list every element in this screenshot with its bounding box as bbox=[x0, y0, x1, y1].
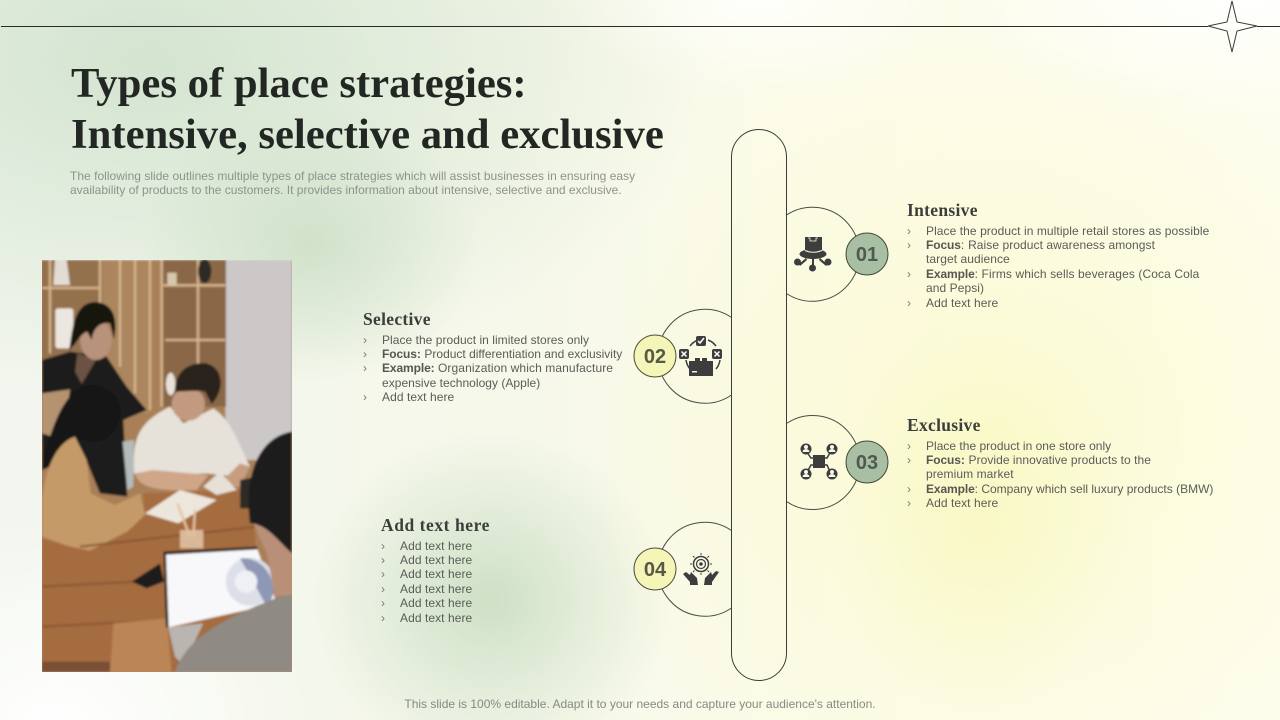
text block: exclusive: Exclusive bbox=[907, 415, 981, 435]
text block: add text here: › bbox=[381, 582, 385, 596]
text block: selective: Selective bbox=[363, 309, 431, 329]
icon: box with check and cross nodes bbox=[679, 336, 722, 376]
text block: add text here: Add text here bbox=[381, 515, 490, 535]
arc 01 bbox=[786, 207, 859, 301]
text block: selective: Add text here bbox=[382, 390, 454, 404]
badge 03: 03 bbox=[856, 452, 878, 474]
text block: selective: › bbox=[363, 361, 367, 375]
footer note: This slide is 100% editable. Adapt it to your needs and capture your audience's attention. bbox=[404, 697, 876, 711]
text block: intensive: target audience bbox=[926, 252, 1010, 266]
text block: intensive: Intensive bbox=[907, 200, 978, 220]
text block: intensive: › bbox=[907, 238, 911, 252]
text block: exclusive: › bbox=[907, 453, 911, 467]
text block: exclusive: Example: Company which sell luxury products (BMW) bbox=[926, 482, 1213, 496]
text block: add text here: Add text here bbox=[400, 582, 472, 596]
text block: exclusive: › bbox=[907, 496, 911, 510]
text block: exclusive: › bbox=[907, 439, 911, 453]
text block: selective: Example: Organization which manufacture bbox=[382, 361, 613, 375]
text block: exclusive: Focus: Provide innovative products to the bbox=[926, 453, 1151, 467]
text block: exclusive: › bbox=[907, 482, 911, 496]
text block: selective: expensive technology (Apple) bbox=[382, 376, 540, 390]
text block: add text here: Add text here bbox=[400, 596, 472, 610]
text block: intensive: and Pepsi) bbox=[926, 281, 984, 295]
top rule with star ornament bbox=[1, 0, 1280, 52]
badge 02: 02 bbox=[644, 346, 666, 368]
text block: exclusive bbox=[907, 415, 1213, 510]
central pill timeline bbox=[731, 129, 787, 681]
text block: intensive: › bbox=[907, 296, 911, 310]
title bbox=[71, 60, 664, 158]
text block: intensive: Example: Firms which sells beverages (Coca Cola bbox=[926, 267, 1199, 281]
text block: selective bbox=[363, 309, 622, 404]
badge 01: 01 bbox=[856, 244, 878, 266]
text block: intensive: Add text here bbox=[926, 296, 998, 310]
node 01: intensive bbox=[786, 206, 888, 302]
text block: add text here: › bbox=[381, 611, 385, 625]
badge 04: 04 bbox=[644, 559, 667, 581]
text block: add text here: › bbox=[381, 567, 385, 581]
arc 04 bbox=[658, 522, 732, 616]
text block: add text here: Add text here bbox=[400, 553, 472, 567]
description: The following slide outlines multiple types of place strategies which will assist businesses in ensuring easy bbox=[70, 169, 635, 183]
text block: intensive: Focus: Raise product awareness amongst bbox=[926, 238, 1155, 252]
icon: hands holding target bbox=[683, 553, 719, 585]
text block: add text here: › bbox=[381, 539, 385, 553]
title: Intensive, selective and exclusive bbox=[71, 111, 664, 158]
text block: selective: Place the product in limited stores only bbox=[382, 333, 589, 347]
arc 02 bbox=[658, 309, 732, 403]
text block: exclusive: Add text here bbox=[926, 496, 998, 510]
text block: selective: Focus: Product differentiation and exclusivity bbox=[382, 347, 622, 361]
text block: add text here: Add text here bbox=[400, 567, 472, 581]
text block: add text here: Add text here bbox=[400, 539, 472, 553]
text block: exclusive: Place the product in one store only bbox=[926, 439, 1111, 453]
text block: intensive: › bbox=[907, 224, 911, 238]
text block: selective: › bbox=[363, 347, 367, 361]
description bbox=[70, 169, 635, 197]
node 03: exclusive bbox=[786, 415, 888, 510]
description: availability of products to the customers. It provides information about intensive, selective and exclusive. bbox=[70, 183, 622, 197]
icon: box on distribution hub bbox=[794, 237, 832, 272]
text block: intensive: Place the product in multiple retail stores as possible bbox=[926, 224, 1209, 238]
icon: box linked to four people bbox=[800, 444, 838, 480]
photo: team meeting around a table bbox=[42, 260, 292, 672]
text block: add text here: Add text here bbox=[400, 611, 472, 625]
node 02: selective bbox=[634, 308, 732, 404]
text block: selective: › bbox=[363, 333, 367, 347]
node 04: add text bbox=[634, 522, 732, 617]
text block: selective: › bbox=[363, 390, 367, 404]
title: Types of place strategies: bbox=[71, 60, 527, 107]
text block: add text here bbox=[381, 515, 490, 625]
text block: intensive bbox=[907, 200, 1209, 310]
text block: intensive: › bbox=[907, 267, 911, 281]
text block: add text here: › bbox=[381, 596, 385, 610]
arc 03 bbox=[786, 415, 860, 510]
text block: add text here: › bbox=[381, 553, 385, 567]
text block: exclusive: premium market bbox=[926, 467, 1014, 481]
